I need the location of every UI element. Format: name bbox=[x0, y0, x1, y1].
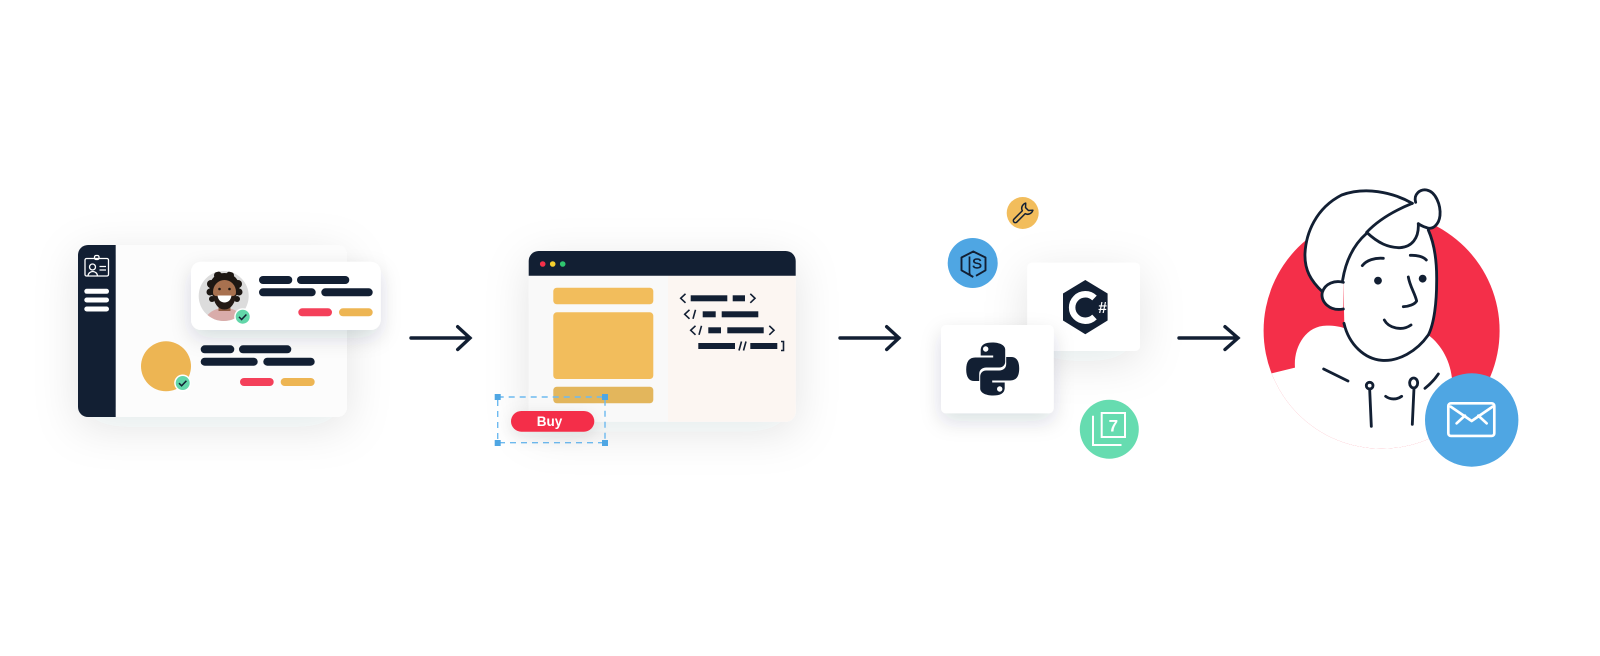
card background bbox=[191, 262, 381, 330]
action pills bbox=[298, 308, 373, 316]
code pane background bbox=[668, 276, 796, 422]
window body bbox=[529, 251, 796, 422]
mouth bbox=[1384, 320, 1411, 328]
face bbox=[1343, 220, 1437, 360]
infographic canvas bbox=[67, 188, 1518, 467]
face outline bbox=[1344, 230, 1437, 360]
card background bbox=[941, 325, 1054, 413]
layout preview blocks bbox=[553, 288, 653, 403]
red background circle bbox=[1264, 213, 1500, 449]
face, hair and clothing line art bbox=[1305, 190, 1440, 426]
card: python bbox=[941, 325, 1054, 413]
icon: id badge bbox=[85, 256, 108, 276]
icon: green version badge: 7 bbox=[1109, 416, 1118, 436]
left drawstring bbox=[1366, 382, 1373, 389]
collar left bbox=[1324, 369, 1348, 381]
icon: python logo bbox=[966, 342, 1019, 396]
check badge bbox=[174, 374, 191, 392]
hair back bbox=[1305, 191, 1432, 296]
quiff bbox=[1415, 190, 1440, 228]
text placeholder lines bbox=[201, 345, 315, 366]
selection handles bbox=[495, 394, 608, 446]
card background bbox=[1027, 263, 1140, 351]
icon: c sharp hexagon: # bbox=[1098, 300, 1107, 317]
eyes bbox=[1375, 278, 1380, 283]
fringe bbox=[1367, 203, 1418, 248]
text placeholder lines bbox=[259, 276, 373, 296]
icon: mail badge bbox=[1425, 373, 1518, 467]
icon: node js badge: S bbox=[972, 256, 982, 272]
eyebrows bbox=[1362, 258, 1383, 266]
buy button selection bbox=[495, 394, 608, 446]
panel: contact list window bbox=[78, 245, 347, 417]
body bbox=[1272, 326, 1452, 449]
window control dots bbox=[540, 261, 566, 267]
illustration: person on red circle bbox=[1264, 188, 1500, 449]
chest line bbox=[1386, 396, 1402, 399]
avatar placeholder bbox=[141, 341, 191, 391]
icon: menu bars bbox=[84, 289, 109, 312]
contact card: first entry bbox=[191, 262, 381, 330]
ear bbox=[1322, 282, 1343, 309]
code placeholder lines bbox=[691, 295, 777, 349]
icon: wrench badge bbox=[1007, 197, 1039, 229]
nose bbox=[1403, 277, 1417, 307]
arrow: step two to three bbox=[840, 327, 899, 350]
buy button bbox=[511, 411, 594, 432]
sidebar bbox=[78, 245, 116, 417]
avatar photo illustration bbox=[198, 271, 249, 321]
title bar bbox=[529, 251, 796, 276]
button label: Buy bbox=[537, 414, 563, 429]
action pills bbox=[240, 378, 315, 386]
window background bbox=[78, 245, 347, 417]
card: c sharp bbox=[1027, 263, 1140, 351]
dashed selection frame bbox=[498, 397, 605, 443]
collar right bbox=[1425, 374, 1438, 388]
code bracket glyphs bbox=[681, 294, 784, 350]
check badge bbox=[234, 308, 251, 325]
hair outline bbox=[1305, 191, 1412, 292]
arrow: step three to four bbox=[1179, 327, 1238, 350]
icon: node js badge bbox=[948, 238, 998, 288]
panel: code editor window bbox=[529, 251, 796, 422]
icon: green version badge bbox=[1080, 400, 1139, 459]
face side line bbox=[1343, 233, 1367, 280]
right drawstring bbox=[1410, 378, 1418, 388]
contact row: second entry bbox=[141, 341, 315, 392]
arrow: step one to two bbox=[411, 327, 470, 350]
